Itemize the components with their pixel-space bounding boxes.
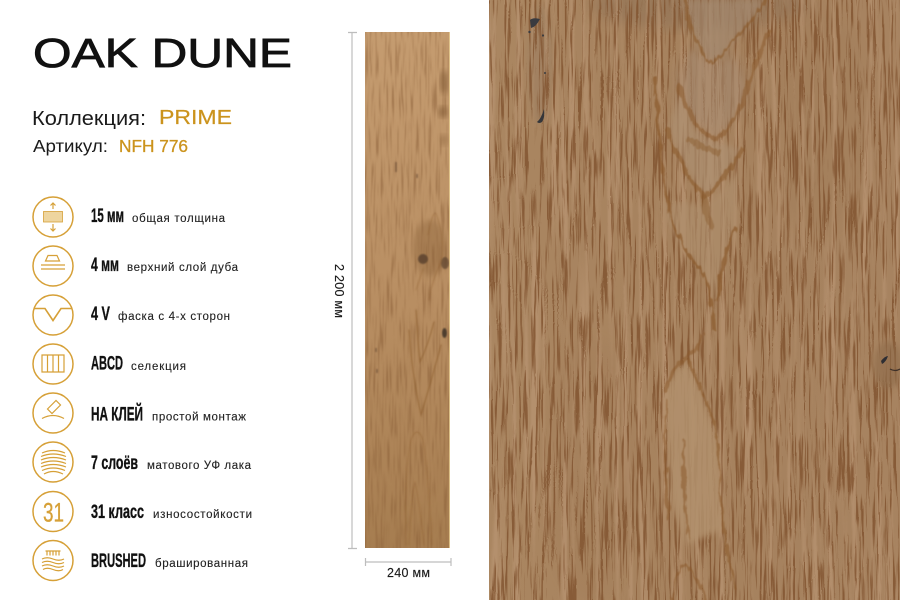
plank grain arches <box>407 213 443 514</box>
feature: thickness <box>33 197 226 237</box>
dimension: plank length <box>332 32 357 548</box>
feature: thickness: 15 мм <box>91 206 124 227</box>
feature: oak top layer <box>33 246 239 286</box>
cathedral grain lines <box>655 0 770 600</box>
feature: brushed: BRUSHED <box>91 551 146 572</box>
wood close-up panel <box>470 0 900 600</box>
feature: brushed <box>33 540 248 580</box>
feature: lacquer <box>33 442 252 482</box>
dimension: plank width <box>366 558 451 580</box>
feature: brushed: брашированная <box>155 558 248 570</box>
article line: NFH 776 <box>119 136 188 156</box>
soft colour patches <box>509 0 900 372</box>
feature: glue <box>33 393 246 433</box>
feature: selection: ABCD <box>91 354 123 374</box>
icon: brush and waves <box>33 540 73 580</box>
article line <box>33 136 188 156</box>
plank knots <box>376 70 449 373</box>
feature: selection <box>33 344 186 384</box>
icon: class 31: 31 <box>43 498 64 528</box>
feature: bevel: 4 V <box>91 304 110 325</box>
collection line: Коллекция: <box>32 108 146 130</box>
feature: glue: простой монтаж <box>152 412 246 424</box>
collection line: PRIME <box>159 107 232 129</box>
feature: bevel: фаска с 4-х сторон <box>118 311 230 323</box>
feature: lacquer: 7 слоёв <box>91 453 138 474</box>
dimension: plank width: 240 мм <box>387 566 430 580</box>
title: OAK DUNE <box>33 30 292 76</box>
feature: glue: НА КЛЕЙ <box>91 404 143 426</box>
icon: thickness <box>33 197 73 237</box>
icon: planks <box>33 344 73 384</box>
feature: lacquer: матового УФ лака <box>147 460 252 472</box>
feature: oak top layer: 4 мм <box>91 255 119 276</box>
icon: glue spreader <box>33 393 73 433</box>
plank swatch <box>365 32 450 548</box>
dimension: plank length: 2 200 мм <box>332 264 346 318</box>
feature: wear class <box>33 492 252 532</box>
collection line <box>32 107 232 130</box>
feature: wear class: износостойкости <box>153 509 252 521</box>
knots and dark spots <box>528 18 900 389</box>
feature: selection: селекция <box>131 361 186 373</box>
icon: top layer <box>33 246 73 286</box>
feature: bevel <box>33 295 230 335</box>
feature: thickness: общая толщина <box>132 213 226 225</box>
article line: Артикул: <box>33 136 108 156</box>
feature: oak top layer: верхний слой дуба <box>127 262 239 274</box>
cathedral grain fills <box>660 0 765 545</box>
icon: bevel <box>33 295 73 335</box>
feature: wear class: 31 класс <box>91 502 144 523</box>
icon: lacquer layers <box>33 442 73 482</box>
icon: class 31 <box>33 492 73 532</box>
